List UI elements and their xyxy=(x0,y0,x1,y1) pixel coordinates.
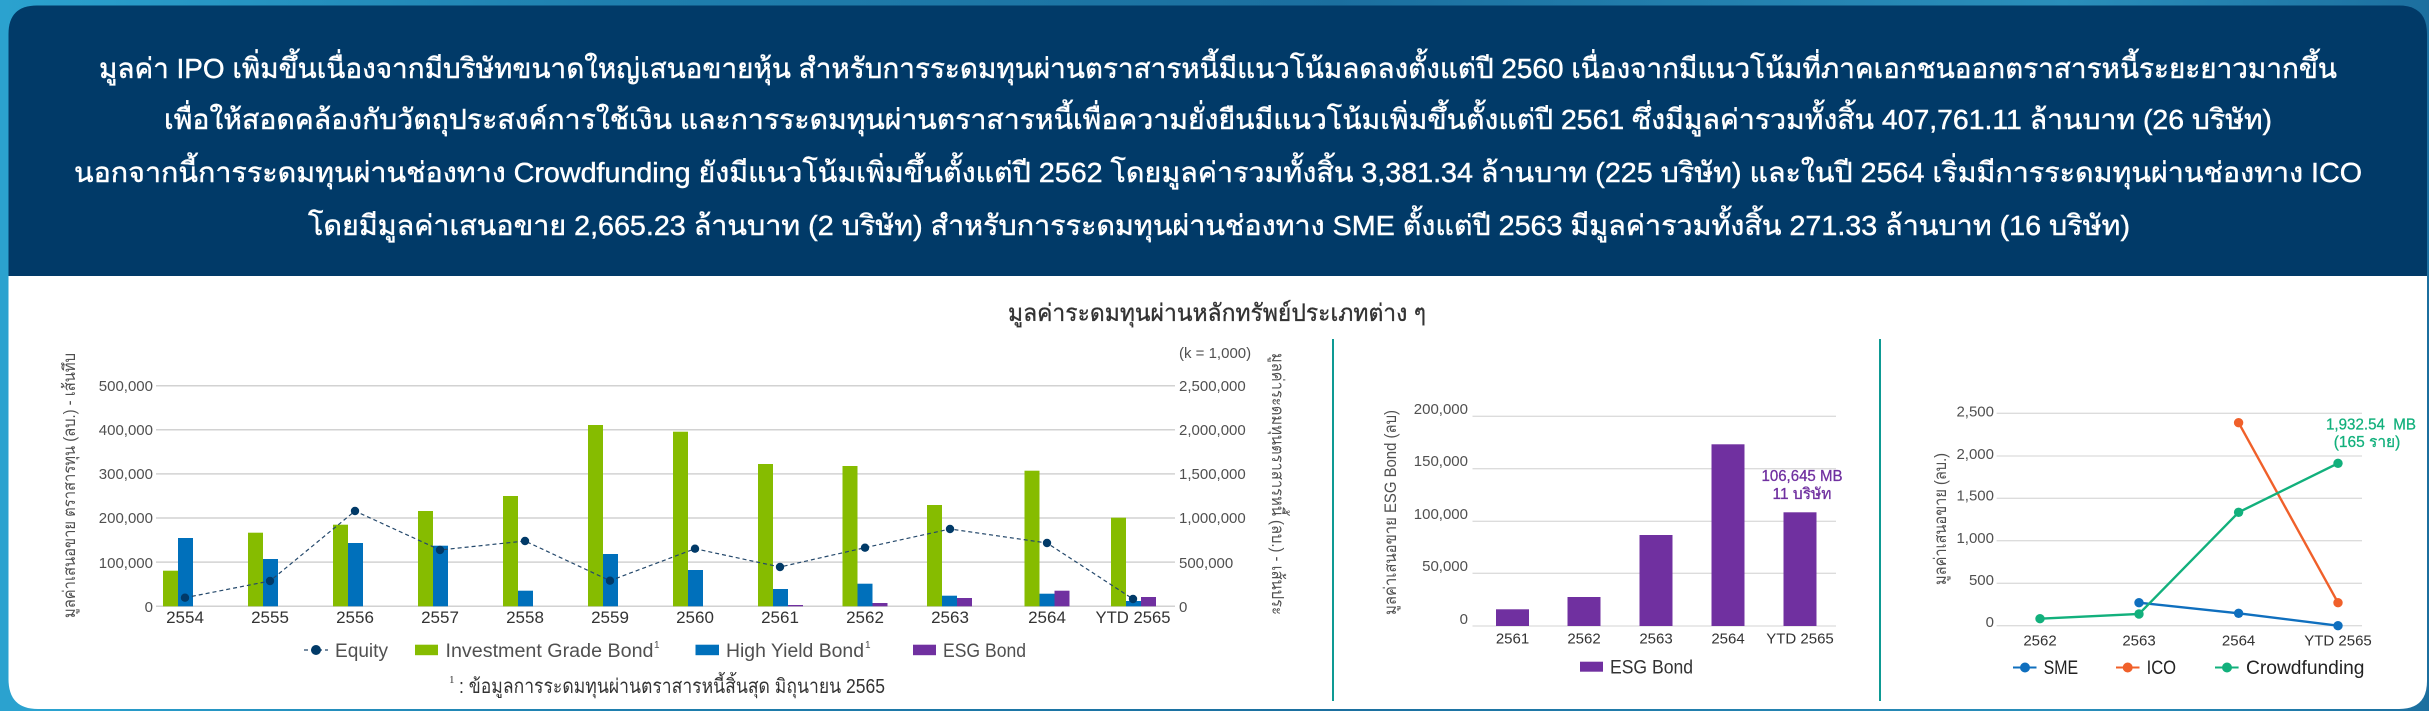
line chart x axis labels: YTD 2565 xyxy=(2304,632,2372,650)
x axis labels: 2561 xyxy=(761,608,799,627)
line chart legend: Crowdfunding xyxy=(2246,658,2364,679)
line chart x axis labels: 2562 xyxy=(2023,632,2057,650)
line: Crowdfunding xyxy=(2035,459,2343,623)
legend: High Yield Bond xyxy=(726,641,864,662)
right axis title: มูลค่าระดมทุนตราสารหนี้ (ลบ.) - เส้นประ xyxy=(1267,353,1290,615)
x axis labels: 2563 xyxy=(931,608,969,627)
left axis title: มูลค่าเสนอขาย ตราสารทุน (ลบ.) - เส้นทึบ xyxy=(60,353,80,618)
ESG legend xyxy=(1580,658,1693,678)
ESG y axis labels: 200,000 xyxy=(1414,401,1468,418)
ESG x axis labels: 2561 xyxy=(1496,630,1529,648)
line chart legend: ICO xyxy=(2147,658,2176,679)
line chart legend: SME xyxy=(2044,658,2078,679)
ESG y axis labels: 100,000 xyxy=(1414,506,1468,523)
ESG callout: 11 บริษัท xyxy=(1772,486,1832,503)
ESG bars xyxy=(1496,444,1816,626)
chart: ESG bond xyxy=(1381,401,1842,678)
line chart x axis labels: 2564 xyxy=(2222,632,2255,650)
right axis labels: 1,000,000 xyxy=(1179,510,1246,527)
footnote: 1 xyxy=(449,674,454,686)
right axis labels: 2,000,000 xyxy=(1179,422,1246,439)
x axis labels: 2554 xyxy=(166,608,204,627)
x axis labels: 2555 xyxy=(251,608,289,627)
equity dashed line xyxy=(181,507,1137,603)
header text line 4: โดยมีมูลค่าเสนอขาย 2,665.23 ล้านบาท (2 บริษัท) สำหรับการระดมทุนผ่านช่องทาง SME ตั้งแต่ปี 2563 มีมูลค่ารวมทั้งสิ้น 271.33 ล้านบาท (16 บริษัท) xyxy=(308,205,2130,243)
line: ICO xyxy=(2234,418,2343,607)
x axis labels: 2562 xyxy=(846,608,884,627)
left axis labels: 200,000 xyxy=(99,510,153,527)
left axis labels: 400,000 xyxy=(99,422,153,439)
left axis labels: 300,000 xyxy=(99,466,153,483)
legend: ESG Bond xyxy=(943,641,1026,662)
investment grade bond bars xyxy=(163,425,1126,606)
header text line 1: มูลค่า IPO เพิ่มขึ้นเนื่องจากมีบริษัทขนาดใหญ่เสนอขายหุ้น สำหรับการระดมทุนผ่านตราสารหนี้มีแนวโน้มลดลงตั้งแต่ปี 2560 เนื่องจากมีแนวโน้มที่ภาคเอกชนออกตราสารหนี้ระยะยาวมากขึ้น xyxy=(99,48,2337,86)
line chart y axis labels: 2,000 xyxy=(1956,446,1994,463)
line chart x axis labels: 2563 xyxy=(2122,632,2156,650)
x axis labels xyxy=(166,608,1170,627)
divider: left teal xyxy=(1332,339,1334,701)
ESG y axis labels xyxy=(1414,401,1468,628)
x axis labels: 2558 xyxy=(506,608,544,627)
legend xyxy=(304,640,1026,662)
ESG x axis labels: 2563 xyxy=(1639,630,1673,648)
header text line 3: นอกจากนี้การระดมทุนผ่านช่องทาง Crowdfunding ยังมีแนวโน้มเพิ่มขึ้นตั้งแต่ปี 2562 โดยมูลค่ารวมทั้งสิ้น 3,381.34 ล้านบาท (225 บริษัท) และในปี 2564 เริ่มมีการระดมทุนผ่านช่องทาง ICO xyxy=(74,152,2362,190)
ESG bond bars xyxy=(788,591,1156,606)
left axis labels: 0 xyxy=(145,599,153,616)
chart: SME, ICO and crowdfunding xyxy=(1931,404,2416,679)
header text line 2: เพื่อให้สอดคล้องกับวัตถุประสงค์การใช้เงิน และการระดมทุนผ่านตราสารหนี้เพื่อความยั่งยืนมีแนวโน้มเพิ่มขึ้นตั้งแต่ปี 2561 ซึ่งมีมูลค่ารวมทั้งสิ้น 407,761.11 ล้านบาท (26 บริษัท) xyxy=(164,99,2272,137)
heading: chart section title: มูลค่าระดมทุนผ่านหลักทรัพย์ประเภทต่าง ๆ xyxy=(1008,299,1426,328)
right axis labels: 500,000 xyxy=(1179,555,1233,572)
ESG callout xyxy=(1762,468,1842,503)
left axis labels: 100,000 xyxy=(99,555,153,572)
ESG legend: ESG Bond xyxy=(1610,658,1693,678)
ESG y axis labels: 50,000 xyxy=(1422,558,1468,575)
line chart y axis labels: 2,500 xyxy=(1956,404,1994,420)
line: SME xyxy=(2134,598,2343,630)
crowdfunding callout: (165 ราย) xyxy=(2334,434,2400,451)
ESG x axis labels: 2562 xyxy=(1567,630,1601,648)
x axis labels: YTD 2565 xyxy=(1096,608,1170,627)
line chart y axis title: มูลค่าเสนอขาย (ลบ.) xyxy=(1931,453,1951,585)
ESG x axis labels xyxy=(1496,630,1834,648)
ESG callout: 106,645 MB xyxy=(1762,468,1842,485)
legend: Equity xyxy=(335,641,388,662)
right axis labels xyxy=(1179,345,1251,616)
left axis labels: 500,000 xyxy=(99,378,153,395)
ESG y axis labels: 0 xyxy=(1460,611,1468,628)
white content panel xyxy=(8,270,2427,709)
right axis labels: 2,500,000 xyxy=(1179,378,1246,395)
x axis labels: 2557 xyxy=(421,608,459,627)
line chart y axis labels: 1,000 xyxy=(1956,530,1994,547)
x axis labels: 2560 xyxy=(676,608,714,627)
left axis labels xyxy=(99,378,153,616)
ESG y axis labels: 150,000 xyxy=(1414,453,1468,470)
ESG x axis labels: 2564 xyxy=(1711,630,1745,648)
ESG y axis title: มูลค่าเสนอขาย ESG Bond (ลบ) xyxy=(1381,410,1401,615)
line chart y axis labels: 0 xyxy=(1986,614,1994,631)
ESG x axis labels: YTD 2565 xyxy=(1766,630,1834,648)
legend: 1 xyxy=(654,640,660,651)
divider: right teal xyxy=(1879,339,1881,701)
crowdfunding callout xyxy=(2326,416,2416,451)
line chart legend xyxy=(2013,658,2364,679)
right axis labels: 0 xyxy=(1179,599,1187,616)
x axis labels: 2564 xyxy=(1028,608,1066,627)
footnote: : ข้อมูลการระดมทุนผ่านตราสารหนี้สิ้นสุด มิถุนายน 2565 xyxy=(459,672,885,699)
crowdfunding callout: 1,932.54 MB xyxy=(2326,416,2416,434)
right axis labels: 1,500,000 xyxy=(1179,466,1246,483)
right axis labels: (k = 1,000) xyxy=(1179,345,1251,362)
x axis labels: 2559 xyxy=(591,608,629,627)
line chart x axis labels xyxy=(2023,632,2372,650)
high yield bond bars xyxy=(178,538,1141,606)
chart: capital raised by security type xyxy=(60,345,1290,699)
line chart y axis labels: 500 xyxy=(1969,572,1994,589)
legend: Investment Grade Bond xyxy=(446,641,654,662)
line chart y axis labels xyxy=(1956,404,1994,631)
legend: 1 xyxy=(865,640,871,651)
line chart y axis labels: 1,500 xyxy=(1956,488,1994,504)
panel: header summary xyxy=(8,6,2427,276)
x axis labels: 2556 xyxy=(336,608,374,627)
